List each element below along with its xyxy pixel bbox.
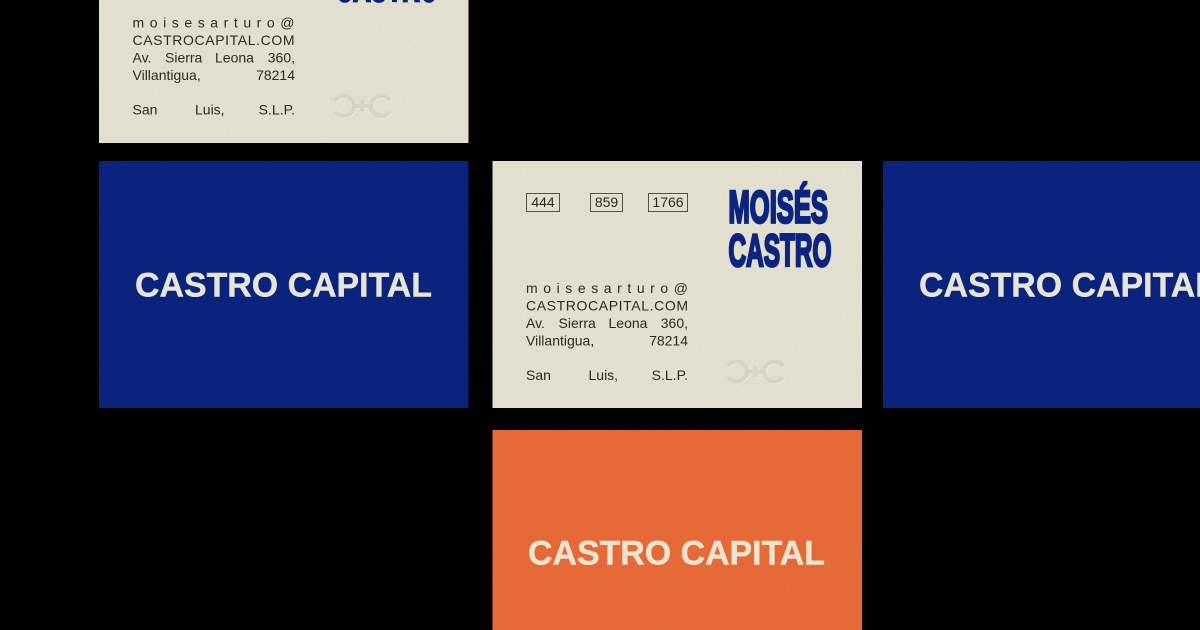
contact text block: Leona <box>608 315 648 331</box>
brand wordmark: CASTRO CAPITAL <box>528 534 825 572</box>
name heading <box>728 182 832 276</box>
panel: left blue card <box>99 161 468 408</box>
contact text block: 360, <box>268 50 295 66</box>
contact text block <box>526 280 688 383</box>
contact text block: S.L.P. <box>652 367 688 383</box>
panel: bottom orange card <box>492 430 862 630</box>
name heading: MOISÉS <box>728 182 828 232</box>
brand wordmark: CASTRO CAPITAL <box>135 266 432 304</box>
panel: center cream business card <box>492 161 862 408</box>
contact text block: CASTROCAPITAL.COM <box>132 32 294 48</box>
contact text block: San <box>132 102 157 118</box>
icon: embossed CC logo <box>336 96 390 117</box>
contact text block: Villantigua, <box>132 67 201 83</box>
contact text block: Sierra <box>558 315 596 331</box>
phone number boxes: 859 <box>595 194 618 210</box>
contact text block: 360, <box>661 315 688 331</box>
contact text block: Luis, <box>195 102 225 118</box>
contact text block: Luis, <box>588 367 618 383</box>
contact text block: moisesarturo@ <box>526 280 688 296</box>
contact text block: Leona <box>215 50 254 66</box>
panel: top cream business card <box>99 0 468 143</box>
name heading: CASTRO <box>728 225 832 276</box>
contact text block <box>132 14 295 118</box>
panel: right blue card <box>883 161 1200 408</box>
phone number boxes <box>526 194 688 212</box>
icon: embossed CC logo <box>729 362 783 382</box>
phone number boxes: 444 <box>531 194 555 210</box>
contact text block: Av. <box>526 315 545 331</box>
contact text block: CASTROCAPITAL.COM <box>526 298 688 314</box>
contact text block: S.L.P. <box>259 102 295 118</box>
contact text block: moisesarturo@ <box>132 14 294 30</box>
contact text block: San <box>526 367 551 383</box>
phone number boxes: 1766 <box>652 194 684 210</box>
contact text block: 78214 <box>649 332 688 348</box>
contact text block: Villantigua, <box>526 332 594 348</box>
contact text block: 78214 <box>256 67 295 83</box>
contact text block: Sierra <box>165 50 203 66</box>
contact text block: Av. <box>132 50 151 66</box>
